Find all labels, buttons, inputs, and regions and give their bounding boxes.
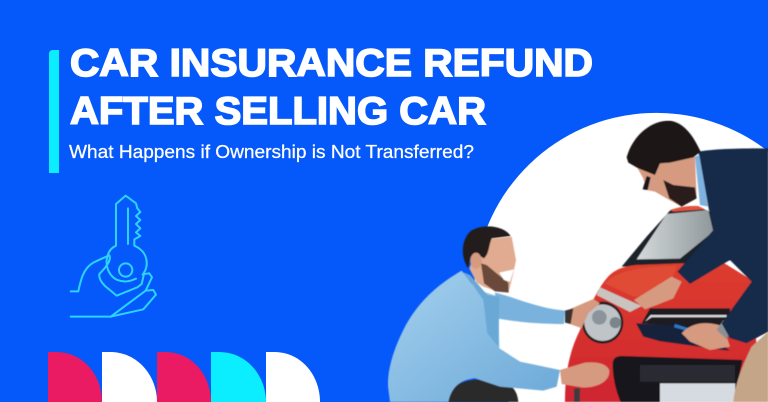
- title: [70, 42, 593, 133]
- red car: [565, 206, 757, 402]
- accent bar: [49, 50, 59, 173]
- title: AFTER SELLING CAR: [70, 90, 486, 133]
- man in light blue jacket: [388, 226, 609, 402]
- subtitle: What Happens if Ownership is Not Transferred?: [69, 141, 474, 162]
- title: CAR INSURANCE REFUND: [70, 42, 593, 85]
- icon: hand holding key: [71, 196, 156, 317]
- man in navy suit: [627, 121, 768, 402]
- decorative quarter shapes: [48, 352, 320, 402]
- white circle backdrop: [474, 113, 768, 402]
- photo: two men inspecting a red car: [388, 121, 768, 402]
